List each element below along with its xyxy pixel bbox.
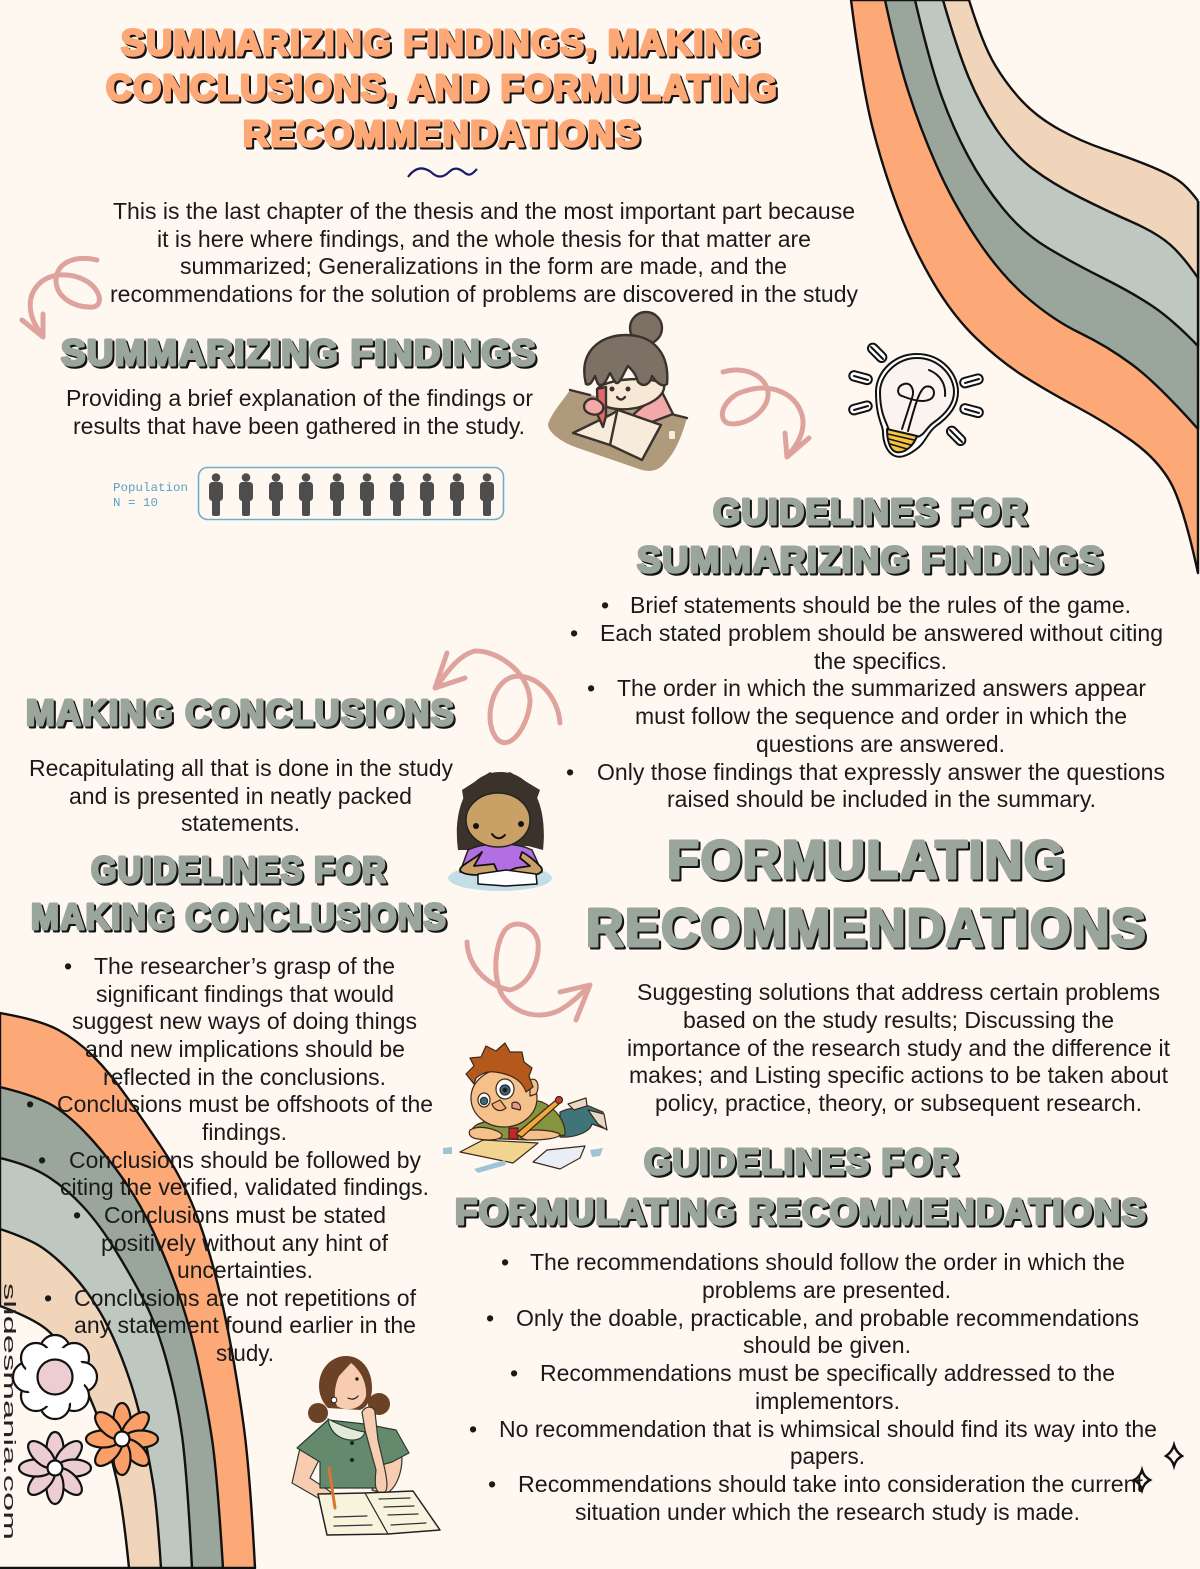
heading: formulating recommendations [586,830,1147,958]
guidelines for formulating recommendations list: Recommendations must be specifically addressed to the [540,1360,1115,1386]
guidelines for summarizing findings list: Brief statements should be the rules of the game. [630,592,1131,618]
heading: guidelines for making conclusions: GUIDELINES FOR [91,849,387,890]
intro text: it is here where findings, and the whole thesis for that matter are [157,226,811,252]
guidelines for making conclusions list: uncertainties. [177,1257,313,1283]
guidelines for summarizing findings list: • [570,620,578,646]
guidelines for making conclusions list: significant findings that would [96,981,394,1007]
flower: orange [86,1403,158,1475]
population diagram: N = 10 [113,497,158,510]
heading: guidelines for summarizing findings [637,491,1104,580]
heading: formulating recommendations: FORMULATING [667,830,1066,890]
guidelines for formulating recommendations list: • [488,1471,496,1497]
guidelines for making conclusions list: positively without any hint of [101,1230,389,1256]
heading: guidelines for making conclusions [31,849,447,937]
heading: guidelines for making conclusions: MAKING CONCLUSIONS [31,896,447,937]
arrow: curl to Summarizing Findings [22,258,99,337]
guidelines for summarizing findings list: The order in which the summarized answers appear [617,675,1146,701]
heading: guidelines for formulating recommendations: GUIDELINES FOR [644,1141,959,1182]
heading: guidelines for summarizing findings: GUIDELINES FOR [713,491,1028,532]
guidelines for making conclusions list: • [64,953,72,979]
guidelines for making conclusions list: Conclusions should be followed by [69,1147,421,1173]
summarizing findings text [66,385,533,439]
icon: sparkles [1134,1445,1182,1490]
guidelines for making conclusions list: • [73,1202,81,1228]
population diagram: Population [113,482,188,495]
intro text [110,198,858,307]
decorative flowers [13,1335,158,1504]
title: RECOMMENDATIONS [243,113,641,154]
squiggle under title [408,168,477,177]
guidelines for summarizing findings list: raised should be included in the summary. [667,786,1096,812]
formulating recommendations text: based on the study results; Discussing the [683,1007,1114,1033]
guidelines for formulating recommendations list: implementors. [755,1388,900,1414]
heading: summarizing findings: SUMMARIZING FINDINGS [61,332,537,373]
guidelines for summarizing findings list: Only those findings that expressly answer the questions [597,759,1165,785]
guidelines for formulating recommendations list: • [510,1360,518,1386]
arrow: curl to Making Conclusions [435,651,560,743]
guidelines for formulating recommendations list: problems are presented. [702,1277,951,1303]
guidelines for formulating recommendations list: should be given. [743,1332,911,1358]
guidelines for summarizing findings list: • [566,759,574,785]
heading: guidelines for formulating recommendations [455,1141,1147,1232]
formulating recommendations text: policy, practice, theory, or subsequent research. [655,1090,1142,1116]
guidelines for making conclusions list: any statement found earlier in the [74,1312,416,1338]
intro text: This is the last chapter of the thesis and the most important part because [113,198,855,224]
guidelines for formulating recommendations list: Only the doable, practicable, and probable recommendations [516,1305,1139,1331]
making conclusions text [29,755,453,836]
formulating recommendations text: Suggesting solutions that address certain problems [637,979,1160,1005]
decorative arch: bottom left rainbow [0,1013,255,1568]
guidelines for making conclusions list: Conclusions must be offshoots of the [57,1091,433,1117]
flower: pink [19,1432,91,1504]
guidelines for making conclusions list: The researcher’s grasp of the [94,953,395,979]
guidelines for making conclusions list: reflected in the conclusions. [103,1064,386,1090]
guidelines for making conclusions list: Conclusions are not repetitions of [74,1285,417,1311]
guidelines for making conclusions list [26,953,433,1366]
making conclusions text: and is presented in neatly packed [69,783,412,809]
guidelines for making conclusions list: • [44,1285,52,1311]
guidelines for formulating recommendations list: • [469,1416,477,1442]
illustration: girl with dark hair reading [448,772,552,891]
guidelines for making conclusions list: suggest new ways of doing things [72,1008,417,1034]
heading: formulating recommendations: RECOMMENDATIONS [586,898,1147,958]
formulating recommendations text [627,979,1171,1116]
guidelines for formulating recommendations list: Recommendations should take into consideration the current [518,1471,1144,1497]
illustration: girl with bun writing [548,312,687,471]
guidelines for summarizing findings list: Each stated problem should be answered without citing [600,620,1163,646]
making conclusions text: Recapitulating all that is done in the study [29,755,453,781]
making conclusions text: statements. [181,810,300,836]
guidelines for summarizing findings list: questions are answered. [756,731,1005,757]
flower: white [13,1335,97,1419]
guidelines for formulating recommendations list: papers. [790,1443,865,1469]
guidelines for summarizing findings list: must follow the sequence and order in which the [635,703,1127,729]
guidelines for summarizing findings list [566,592,1165,812]
guidelines for formulating recommendations list: • [486,1305,494,1331]
formulating recommendations text: makes; and Listing specific actions to be taken about [629,1062,1169,1088]
guidelines for making conclusions list: and new implications should be [85,1036,405,1062]
guidelines for summarizing findings list: • [601,592,609,618]
intro text: recommendations for the solution of problems are discovered in the study [110,281,858,307]
formulating recommendations text: importance of the research study and the difference it [627,1035,1171,1061]
heading: guidelines for summarizing findings: SUMMARIZING FINDINGS [637,539,1104,580]
guidelines for formulating recommendations list: • [501,1249,509,1275]
guidelines for formulating recommendations list: The recommendations should follow the order in which the [530,1249,1125,1275]
title: CONCLUSIONS, AND FORMULATING [106,67,778,108]
guidelines for summarizing findings list: • [587,675,595,701]
heading: making conclusions: MAKING CONCLUSIONS [26,692,455,733]
guidelines for formulating recommendations list: No recommendation that is whimsical should find its way into the [499,1416,1157,1442]
guidelines for making conclusions list: • [38,1147,46,1173]
arrow: curl to Formulating Recommendations [467,924,590,1020]
illustration: boy writing on floor [443,1043,607,1173]
summarizing findings text: results that have been gathered in the study. [73,413,525,439]
guidelines for making conclusions list: citing the verified, validated findings. [60,1174,429,1200]
title: SUMMARIZING FINDINGS, MAKING [121,22,761,63]
guidelines for formulating recommendations list [469,1249,1157,1525]
illustration: girl in green dress thinking [292,1356,440,1535]
slidesmania credit: slidesmania.com [0,1283,19,1540]
icon: lightbulb [848,342,984,457]
summarizing findings text: Providing a brief explanation of the findings or [66,385,533,411]
guidelines for making conclusions list: findings. [202,1119,287,1145]
arrow: curl to lightbulb [722,370,809,457]
intro text: summarized; Generalizations in the form are made, and the [180,253,787,279]
guidelines for making conclusions list: • [26,1091,34,1117]
guidelines for summarizing findings list: the specifics. [814,648,947,674]
title [106,22,778,154]
population diagram [113,468,504,520]
guidelines for making conclusions list: Conclusions must be stated [104,1202,386,1228]
heading: guidelines for formulating recommendations: FORMULATING RECOMMENDATIONS [455,1191,1147,1232]
guidelines for formulating recommendations list: situation under which the research study is made. [575,1499,1080,1525]
decorative wave: top right rainbow [851,0,1200,573]
guidelines for making conclusions list: study. [216,1340,274,1366]
